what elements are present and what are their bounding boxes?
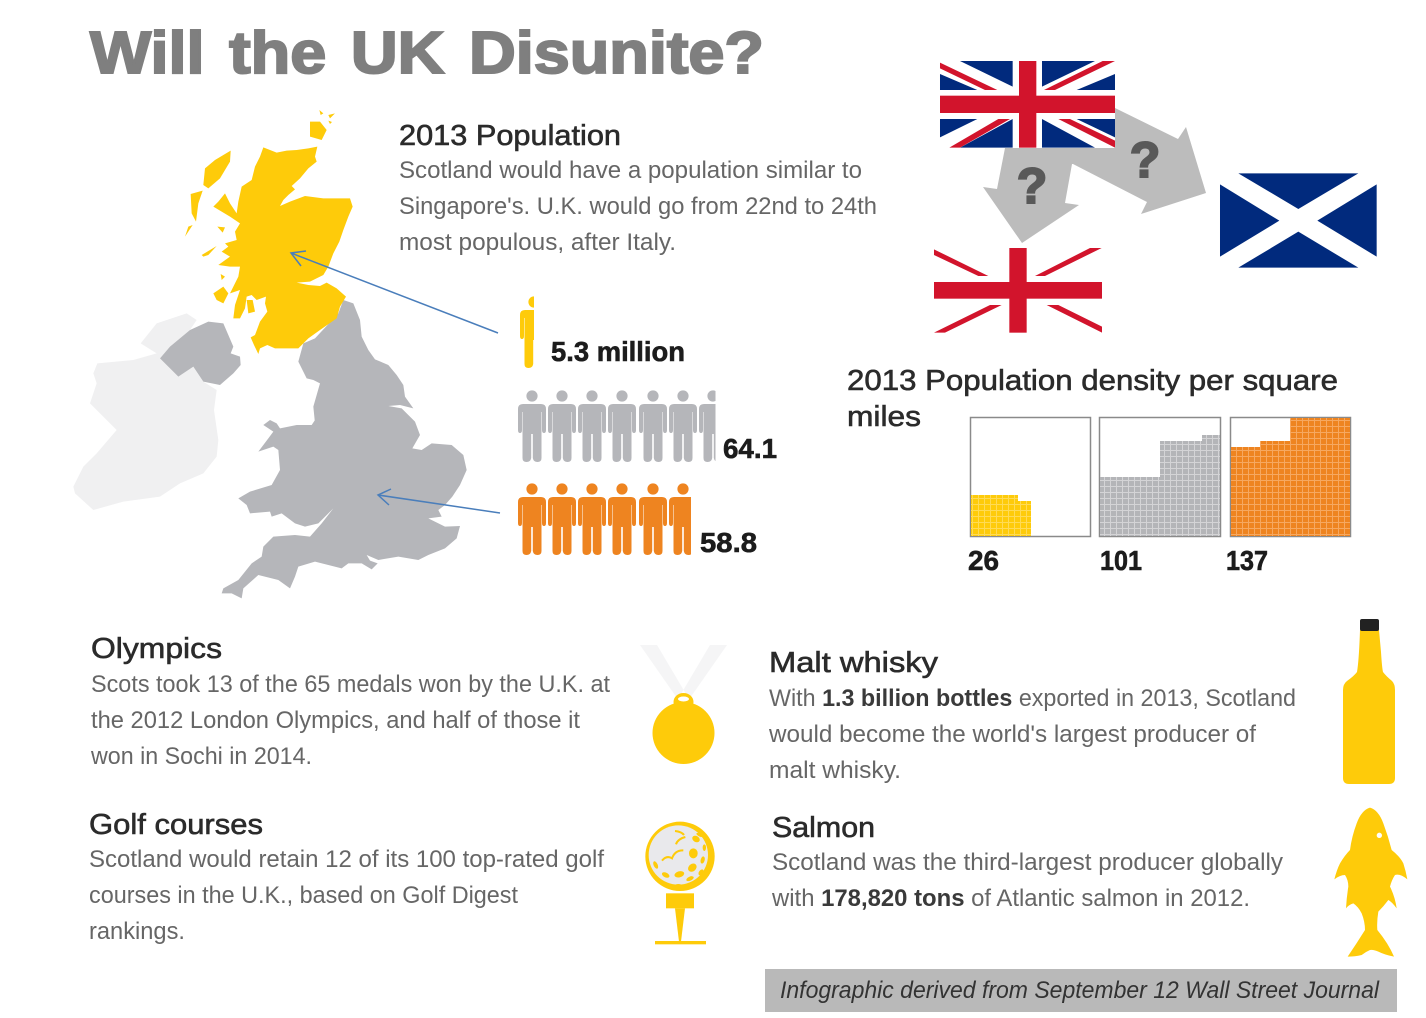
map: Northern Ireland — [160, 322, 241, 385]
flag: Scotland — [1220, 173, 1377, 268]
heading: Salmon: Salmon — [772, 812, 875, 844]
text: Malt whisky: would become the world's largest producer of — [768, 721, 1256, 748]
map: Ireland — [73, 313, 218, 510]
arrows: split question — [983, 108, 1206, 243]
heading: Golf courses: Golf courses — [89, 809, 263, 841]
arrow: population to England — [378, 489, 500, 513]
arrows: split question: ? — [1017, 158, 1047, 214]
value: 26: 26 — [968, 545, 999, 576]
chart: density rest of UK — [1230, 418, 1350, 536]
pictogram: rest of UK population — [518, 483, 697, 555]
value: 101: 101 — [1100, 545, 1142, 576]
map: Isle of Wight — [362, 561, 378, 569]
text: population: most populous, after Italy. — [399, 229, 676, 256]
flag: England and Wales remainder — [934, 248, 1102, 333]
pictogram: UK population — [518, 390, 727, 462]
pictogram: Scotland population — [520, 296, 534, 368]
value: 58.8: 58.8 — [700, 527, 757, 558]
flag: United Kingdom — [940, 61, 1115, 148]
source note — [765, 969, 1397, 1012]
text: population — [399, 157, 877, 256]
arrows: split question: ? — [1130, 132, 1160, 188]
text: Salmon — [771, 849, 1283, 912]
map of Britain and Ireland — [73, 110, 467, 598]
icon: salmon — [1334, 808, 1407, 957]
heading: Malt whisky: Malt whisky — [769, 647, 939, 679]
chart: density Scotland — [970, 418, 1090, 536]
text: Malt whisky: With 1.3 billion bottles exported in 2013, Scotland — [769, 685, 1296, 712]
text: Olympics: won in Sochi in 2014. — [90, 743, 312, 770]
arrow: population to Scotland — [291, 251, 498, 333]
text: Golf courses — [89, 846, 604, 945]
icon: medal — [640, 645, 727, 764]
icon: whisky bottle — [1343, 619, 1395, 784]
heading: population density: 2013 Population density per square — [847, 365, 1338, 397]
heading: population density: miles — [847, 401, 921, 433]
value: 64.1: 64.1 — [723, 433, 777, 464]
text: Olympics — [90, 671, 610, 770]
heading: Olympics: Olympics — [91, 633, 222, 665]
text: population: Scotland would have a population similar to — [399, 157, 862, 184]
text: Golf courses: rankings. — [89, 918, 185, 945]
value: 5.3 million: 5.3 million — [551, 336, 685, 367]
heading: 2013 population: 2013 Population — [399, 120, 621, 152]
text: Malt whisky: malt whisky. — [769, 757, 901, 784]
text: Olympics: the 2012 London Olympics, and half of those it — [91, 707, 580, 734]
text: Golf courses: courses in the U.K., based on Golf Digest — [89, 882, 518, 909]
text: Salmon: Scotland was the third-largest producer globally — [772, 849, 1283, 876]
text: population: Singapore's. U.K. would go from 22nd to 24th — [399, 193, 877, 220]
text: Salmon: with 178,820 tons of Atlantic salmon in 2012. — [771, 885, 1250, 912]
chart: density UK — [1100, 418, 1220, 536]
heading: population density — [847, 365, 1338, 433]
text: Olympics: Scots took 13 of the 65 medals won by the U.K. at — [91, 671, 610, 698]
text: Golf courses: Scotland would retain 12 of its 100 top-rated golf — [89, 846, 604, 873]
icon: golf ball on tee — [645, 822, 715, 944]
map: Scotland — [213, 147, 353, 354]
value: 137: 137 — [1226, 545, 1268, 576]
title: Will the UK Disunite? — [90, 20, 764, 86]
text: Malt whisky — [768, 685, 1296, 784]
map: Scottish islands — [185, 110, 335, 313]
map: England and Wales — [222, 300, 467, 598]
source note: Infographic derived from September 12 Wall Street Journal — [780, 977, 1380, 1004]
